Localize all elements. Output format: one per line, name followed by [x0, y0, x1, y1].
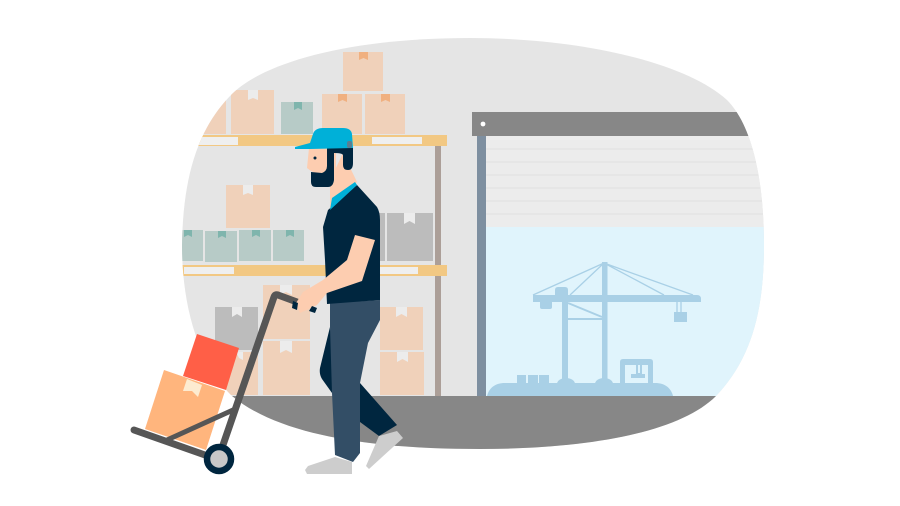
worker — [292, 128, 403, 474]
collar — [330, 182, 357, 210]
box stack: top shelf — [196, 52, 405, 134]
floor — [232, 396, 716, 449]
trolley frame — [134, 295, 297, 455]
front shoe — [305, 457, 352, 474]
wheel — [207, 447, 231, 471]
box stack: middle shelf — [182, 185, 433, 262]
handle grip — [292, 301, 317, 313]
neck — [330, 153, 357, 208]
port crane seen through door — [487, 262, 701, 396]
arm and hand — [296, 235, 375, 313]
top shelf plank — [194, 135, 447, 146]
eye — [314, 156, 316, 160]
middle shelf plank — [182, 265, 447, 276]
orange box — [145, 370, 225, 450]
roller door — [472, 112, 776, 396]
back leg — [320, 327, 397, 440]
box stack: bottom shelf — [215, 285, 424, 395]
hand truck with boxes — [134, 295, 297, 471]
face — [307, 148, 336, 176]
cap — [295, 128, 353, 149]
illustration: warehouse worker — [130, 38, 764, 474]
back shoe — [366, 431, 403, 469]
cap strap — [347, 141, 352, 148]
torso — [323, 185, 380, 304]
hair and beard — [311, 148, 353, 187]
red box — [183, 334, 239, 390]
warehouse background blob — [170, 30, 780, 460]
shelving: uprights — [435, 146, 441, 396]
front leg — [330, 300, 380, 462]
box tag — [183, 379, 202, 397]
